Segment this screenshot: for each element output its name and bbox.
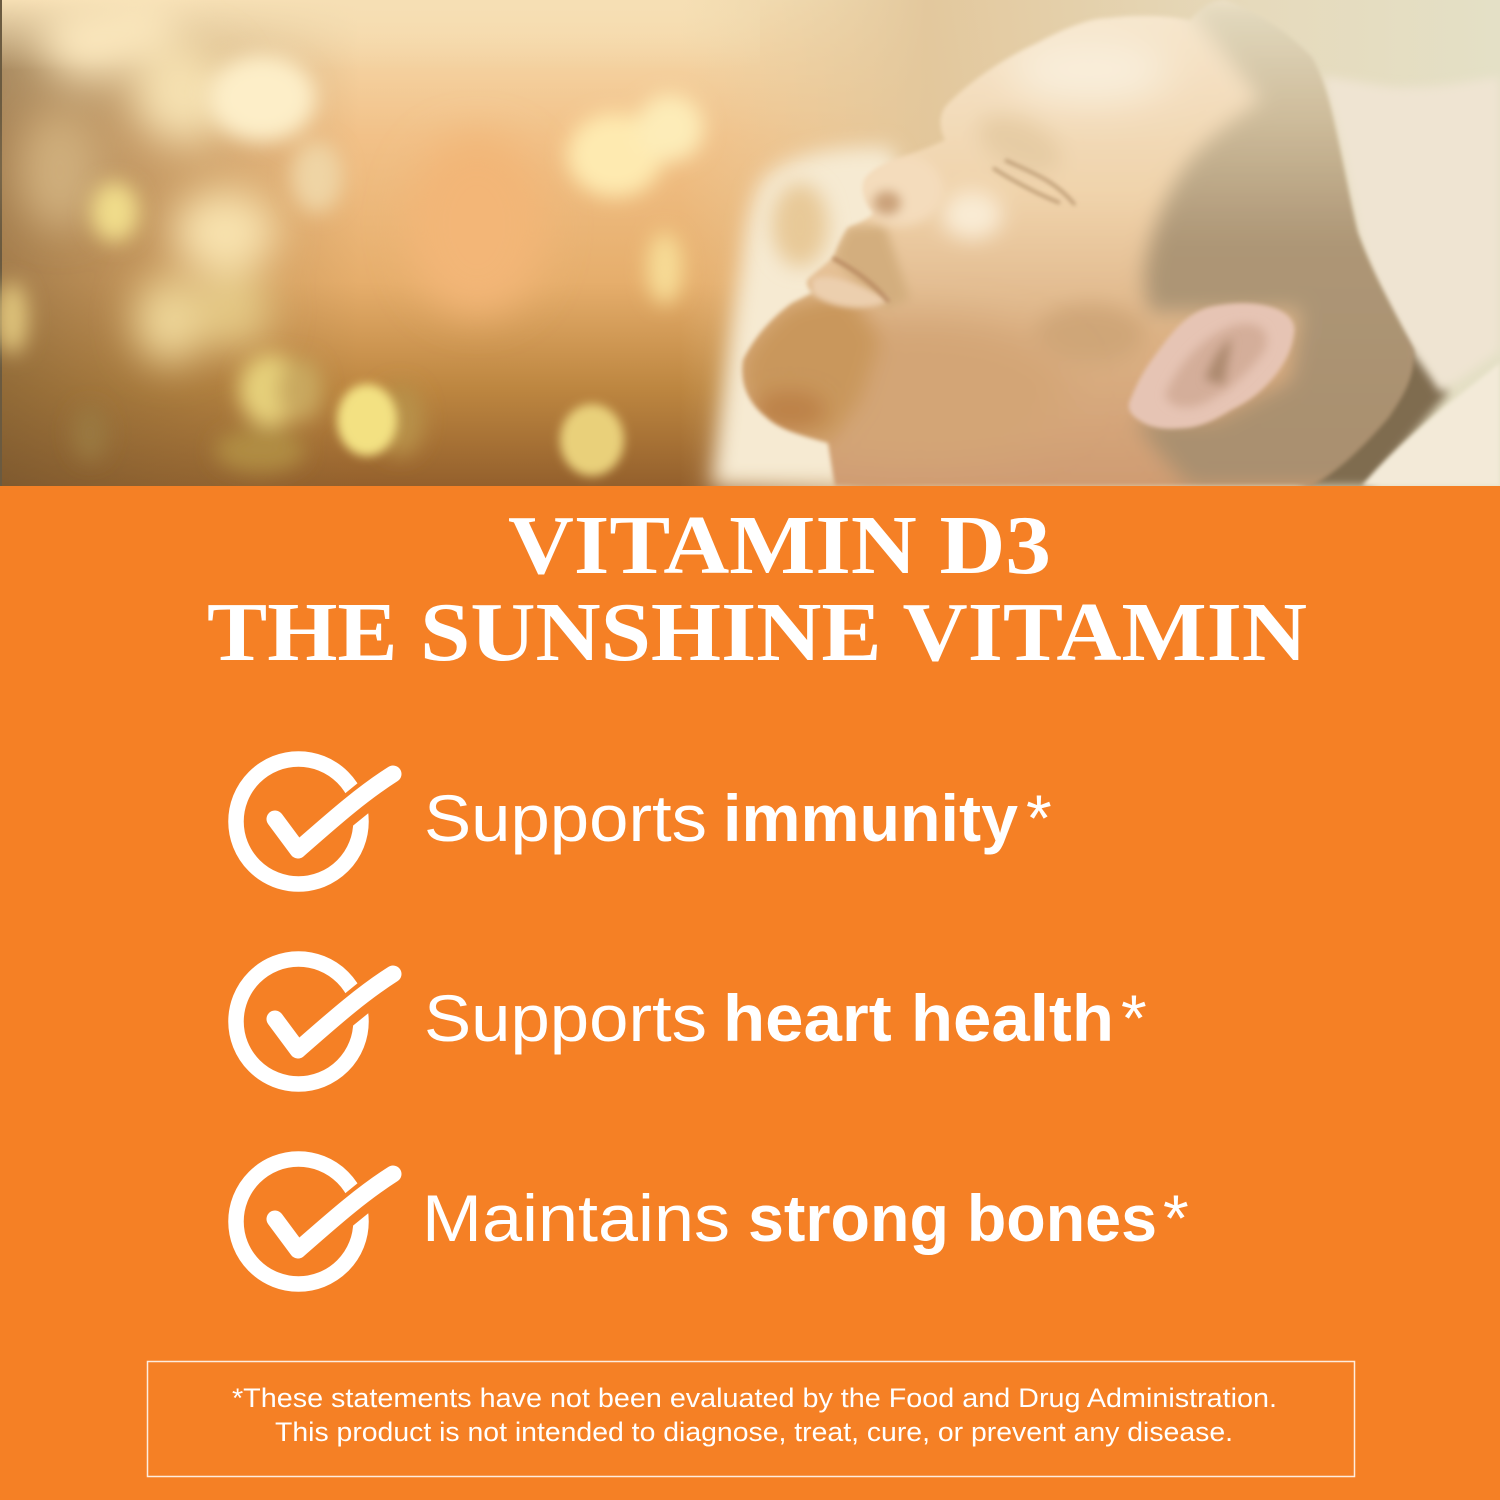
icon: check circle [236, 959, 394, 1084]
benefit: immunity [236, 759, 1052, 884]
beard on chin [742, 290, 880, 443]
benefit: immunity: * [1026, 781, 1052, 855]
nose [863, 159, 942, 228]
disclaimer box: *These statements have not been evaluated by the Food and Drug Administration. [232, 1383, 1277, 1413]
bokeh background lights [0, 0, 704, 476]
disclaimer box: This product is not intended to diagnose, treat, cure, or prevent any disease. [275, 1417, 1233, 1447]
benefit: heart health: heart health [723, 981, 1114, 1055]
title: VITAMIN D3 [508, 499, 1051, 592]
eye socket [980, 112, 1057, 166]
stubble on jaw [1043, 302, 1139, 360]
benefit: strong bones [236, 1159, 1189, 1284]
benefit: strong bones: * [1163, 1181, 1189, 1255]
ear [1129, 303, 1294, 429]
benefit: immunity: immunity [723, 781, 1018, 855]
benefit: heart health: Supports [424, 981, 707, 1055]
icon: check circle [236, 1159, 394, 1284]
right arm behind head [1322, 77, 1500, 392]
mouth line [833, 258, 889, 302]
orange panel [0, 486, 1500, 1500]
moustache [833, 225, 910, 310]
benefit: heart health [236, 959, 1147, 1084]
forearm lower right [1362, 363, 1500, 486]
left arm behind head [698, 136, 903, 486]
benefit: strong bones: strong bones [748, 1181, 1157, 1255]
cheek highlight [942, 191, 1002, 239]
closed eye [993, 160, 1075, 205]
benefit: heart health: * [1121, 981, 1147, 1055]
benefit: strong bones: Maintains [422, 1181, 730, 1255]
dark shirt gap [1300, 330, 1448, 486]
lips [812, 277, 889, 308]
hair [1135, 0, 1430, 486]
disclaimer box [148, 1362, 1354, 1476]
photo: man relaxing in the sun [0, 0, 1500, 486]
forehead highlight [1010, 38, 1170, 102]
icon: check circle [236, 759, 394, 884]
benefit: immunity: Supports [424, 781, 707, 855]
head with face and hair [730, 0, 1430, 486]
title: THE SUNSHINE VITAMIN [207, 586, 1307, 679]
title [207, 499, 1307, 679]
